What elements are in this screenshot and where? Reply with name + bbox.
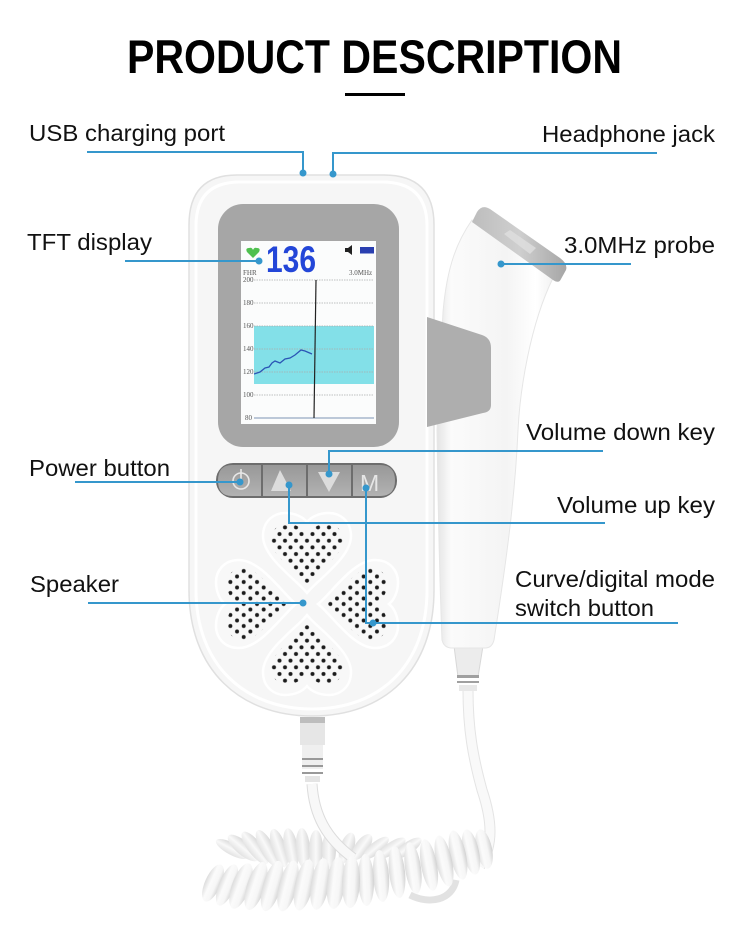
device body bbox=[189, 175, 434, 716]
callout: Speaker bbox=[30, 571, 306, 606]
axis labels: 3.0MHz bbox=[349, 269, 372, 277]
callout: Volume up key bbox=[286, 482, 716, 523]
front centre coil bbox=[341, 856, 361, 908]
display bezel bbox=[218, 204, 399, 447]
mode button bbox=[353, 465, 395, 496]
cable from probe bbox=[468, 690, 490, 866]
loop under coil bbox=[410, 880, 456, 900]
axis labels: 80 bbox=[245, 414, 252, 422]
button strip: M bbox=[360, 470, 379, 496]
cable from device bbox=[312, 784, 353, 858]
axis labels bbox=[243, 269, 372, 422]
axis labels: FHR bbox=[243, 269, 257, 277]
callout: Headphone jack bbox=[330, 121, 716, 178]
battery icon bbox=[360, 247, 374, 254]
callout: 3.0MHz probe bbox=[498, 232, 715, 268]
front coils right bbox=[357, 828, 496, 906]
axis labels: 200 bbox=[243, 276, 254, 284]
callout: Power button bbox=[29, 455, 244, 486]
axis labels: 140 bbox=[243, 345, 254, 353]
probe holder bbox=[427, 317, 491, 427]
coiled cable bbox=[198, 690, 496, 913]
axis labels: 160 bbox=[243, 322, 254, 330]
heart icon bbox=[246, 248, 260, 258]
device connector bbox=[300, 717, 325, 782]
callout: Curve/digital mode switch button bbox=[362, 484, 715, 626]
probe handle bbox=[437, 220, 553, 648]
callout: Volume down key bbox=[326, 419, 716, 478]
callout: TFT display bbox=[27, 229, 262, 264]
callout: USB charging port bbox=[29, 120, 306, 176]
callout: Volume down key: Volume down key bbox=[526, 419, 716, 445]
bottom heart bbox=[263, 615, 351, 695]
speaker grille bbox=[216, 513, 398, 695]
title: PRODUCT DESCRIPTION bbox=[127, 30, 622, 83]
back coils bbox=[213, 827, 425, 869]
probe head cap bbox=[472, 207, 566, 282]
front coils left bbox=[198, 856, 348, 913]
power button bbox=[218, 465, 261, 496]
callout: Speaker: Speaker bbox=[30, 571, 119, 597]
right heart bbox=[318, 560, 398, 648]
left heart bbox=[216, 560, 296, 648]
axis labels: 180 bbox=[243, 299, 254, 307]
title underline bbox=[345, 93, 405, 96]
TFT screen bbox=[241, 239, 376, 424]
heart-rate trace bbox=[254, 350, 312, 374]
callout: Curve/digital mode switch button: switch button bbox=[515, 595, 654, 621]
heart rate number: 136 bbox=[266, 239, 316, 280]
button strip bbox=[216, 463, 397, 498]
volume down button bbox=[308, 465, 351, 496]
probe bbox=[427, 207, 566, 691]
safe band bbox=[254, 326, 374, 384]
callout: Power button: Power button bbox=[29, 455, 170, 481]
marker line bbox=[314, 280, 316, 418]
top heart bbox=[263, 513, 351, 593]
axis labels: 100 bbox=[243, 391, 254, 399]
callout: Volume up key: Volume up key bbox=[557, 492, 716, 518]
axis labels: 120 bbox=[243, 368, 254, 376]
callout: USB charging port: USB charging port bbox=[29, 120, 226, 146]
callout: Headphone jack: Headphone jack bbox=[542, 121, 716, 147]
callout: 3.0MHz probe: 3.0MHz probe bbox=[564, 232, 715, 258]
volume up button bbox=[263, 465, 306, 496]
probe cord strain relief bbox=[454, 646, 483, 691]
sound icon bbox=[345, 245, 352, 255]
callout: Curve/digital mode switch button: Curve/digital mode bbox=[515, 566, 715, 592]
callout: TFT display: TFT display bbox=[27, 229, 153, 255]
